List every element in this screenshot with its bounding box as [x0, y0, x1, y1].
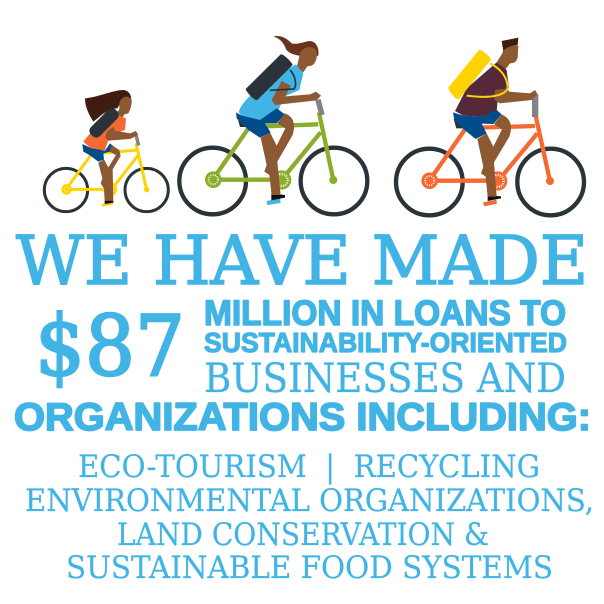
- illustration: cyclists: [44, 36, 584, 215]
- text: million in loans to: MILLION IN LOANS TO: [204, 294, 566, 333]
- heading: we have made: WE HAVE MADE: [16, 222, 588, 300]
- list of sectors: [25, 449, 594, 586]
- cyclist: woman on green bike: [179, 36, 367, 214]
- text: sustainability-oriented: SUSTAINABILITY-ORIENTED: [204, 327, 567, 358]
- list of sectors: LAND CONSERVATION &: [117, 517, 489, 553]
- cyclist: man on orange bike: [396, 38, 584, 215]
- cyclist: child on yellow bike: [44, 90, 168, 212]
- text: organizations including: ORGANIZATIONS INCLUDING:: [14, 396, 591, 439]
- headline number: $87: $87: [35, 298, 185, 395]
- list of sectors: SUSTAINABLE FOOD SYSTEMS: [66, 550, 553, 586]
- text: businesses and: BUSINESSES AND: [204, 356, 566, 402]
- list of sectors: ECO-TOURISM | RECYCLING: [78, 449, 540, 485]
